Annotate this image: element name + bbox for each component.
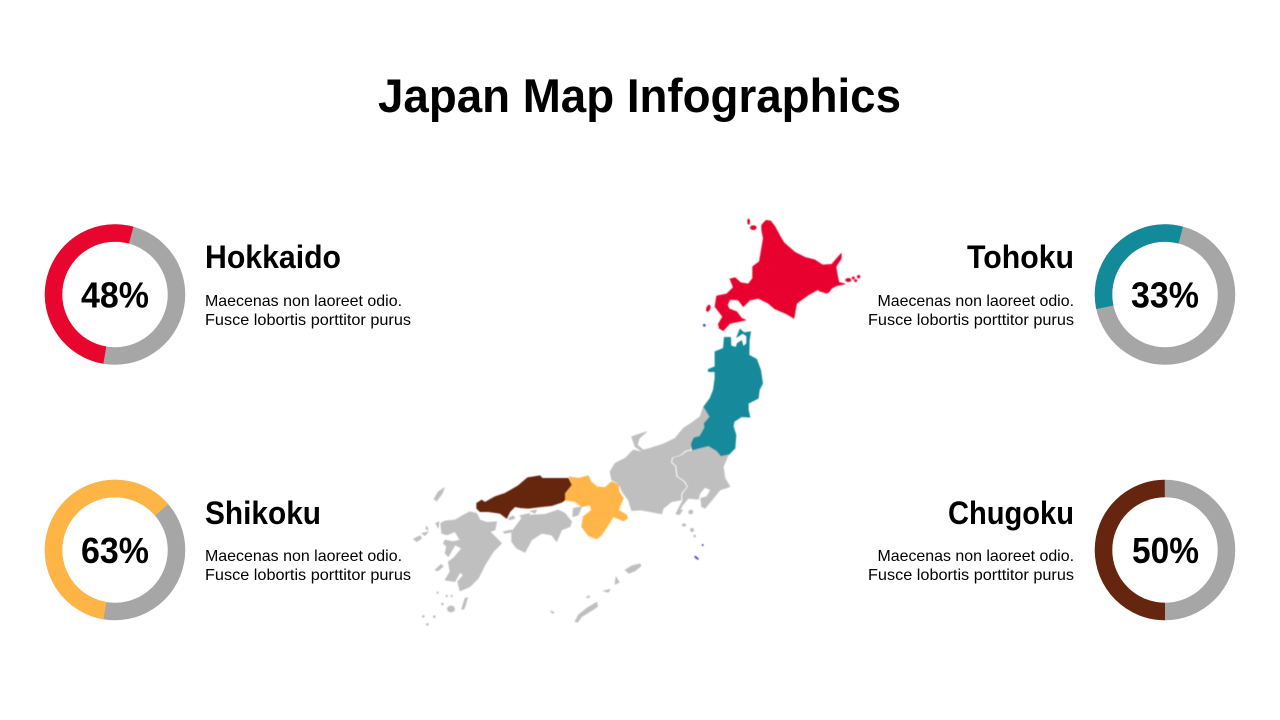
panel: Tohoku <box>868 222 1238 367</box>
donut: 33% <box>1092 222 1238 367</box>
region: Hokkaido <box>706 219 860 331</box>
donut: 33%: 33% <box>1131 274 1199 316</box>
islands: southern and inland sea <box>413 488 641 625</box>
donut: 63% <box>44 479 186 621</box>
heading: Tohoku <box>967 239 1074 275</box>
region: Chugoku <box>477 476 572 518</box>
region: Kansai <box>566 476 628 539</box>
donut: 48% <box>44 224 186 365</box>
description: Fusce lobortis porttitor purus <box>868 567 1074 584</box>
donut: 50% <box>1104 488 1226 612</box>
region: Shikoku <box>512 510 572 552</box>
panel: Hokkaido <box>44 224 411 365</box>
donut: 63%: 63% <box>81 530 149 571</box>
islands: Pacific <box>676 510 696 537</box>
heading: Hokkaido <box>205 239 341 275</box>
heading: Chugoku <box>948 495 1074 531</box>
description <box>868 293 1074 329</box>
description: Maecenas non laoreet odio. <box>205 548 402 565</box>
description <box>205 548 411 584</box>
description: Fusce lobortis porttitor purus <box>868 312 1074 329</box>
map of Japan <box>413 219 860 625</box>
description: Fusce lobortis porttitor purus <box>205 567 411 584</box>
region: Kyushu <box>441 512 502 591</box>
region: Chubu <box>610 407 709 514</box>
donut: 50%: 50% <box>1132 530 1199 571</box>
description: Maecenas non laoreet odio. <box>878 293 1074 310</box>
region: Kanto <box>672 447 730 514</box>
panel: Chugoku <box>868 488 1226 612</box>
description: Maecenas non laoreet odio. <box>878 548 1074 565</box>
title: Japan Map Infographics <box>378 69 901 122</box>
panel: Shikoku <box>44 479 411 621</box>
islands: Izu <box>689 511 693 514</box>
donut: 48%: 48% <box>81 274 149 316</box>
description <box>205 293 411 329</box>
description: Maecenas non laoreet odio. <box>205 293 402 310</box>
description: Fusce lobortis porttitor purus <box>205 312 411 329</box>
description <box>868 548 1074 584</box>
islands: blue markers <box>694 324 706 560</box>
heading: Shikoku <box>205 495 321 531</box>
region: Tohoku <box>691 329 763 456</box>
